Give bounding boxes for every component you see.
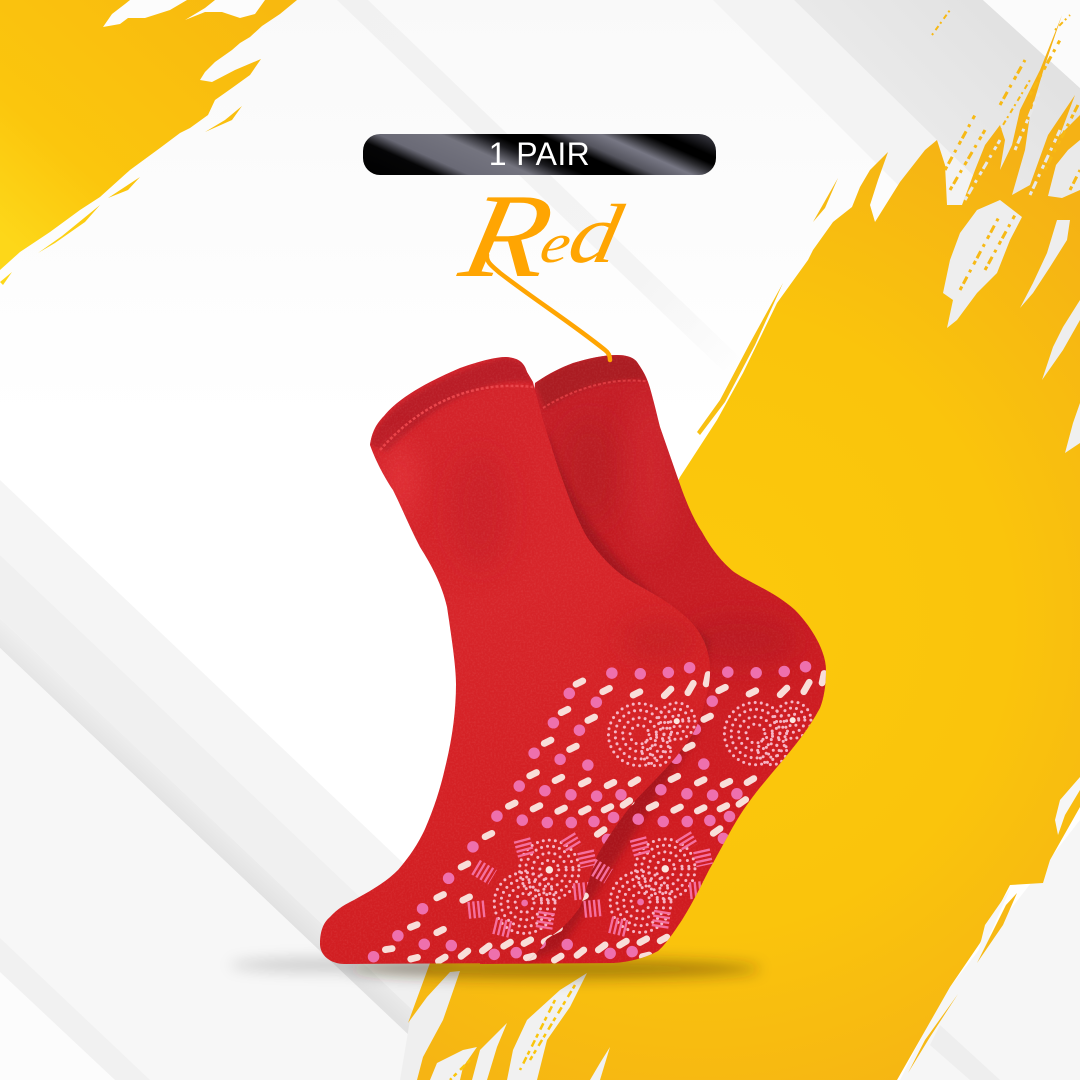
leader line from label to sock — [487, 255, 610, 360]
pill badge: 1 PAIR: 1 PAIR — [489, 136, 590, 172]
label text: Red: e — [535, 213, 577, 275]
label text: Red: R — [450, 170, 563, 303]
pill badge: 1 PAIR — [363, 134, 716, 175]
red sock: front — [310, 350, 720, 980]
red sock: back — [480, 340, 840, 980]
ground shadow under socks — [230, 958, 760, 979]
label text: Red: d — [562, 188, 630, 280]
white brush streaks at bottom — [430, 973, 610, 1080]
yellow brush stroke: top left — [0, 0, 297, 285]
yellow brush stroke: right main — [400, 10, 1080, 1080]
